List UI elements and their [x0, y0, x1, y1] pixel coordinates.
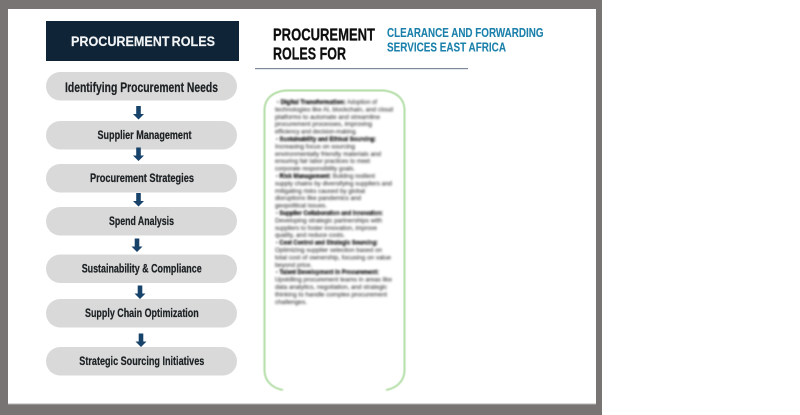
panel: blurred procurement trends text: thinking to handle complex procurement	[275, 291, 387, 298]
arrow 1	[133, 106, 144, 120]
panel: blurred procurement trends text: platforms to automate and streamline	[275, 114, 380, 121]
subtitle: company name: CLEARANCE AND FORWARDING	[387, 26, 544, 40]
panel: blurred procurement trends text: · Sustainability and Ethical Sourcing:	[276, 136, 376, 143]
panel: blurred procurement trends text: geopolitical issues.	[275, 203, 327, 210]
header banner: PROCUREMENT ROLES	[71, 34, 215, 49]
panel: blurred procurement trends text: · Talent Development in Procurement:	[276, 269, 379, 276]
arrow 4	[132, 238, 142, 252]
panel: blurred procurement trends text: · Digital Transformation: Adoption of	[277, 99, 377, 106]
step: Spend Analysis: Spend Analysis	[109, 216, 174, 228]
panel: blurred procurement trends text	[275, 99, 393, 306]
panel: blurred procurement trends text: Optimizing supplier selection based on	[275, 247, 382, 254]
panel: blurred procurement trends text: procurement processes, improving	[275, 121, 372, 128]
panel: blurred procurement trends text: Developing strategic partnerships with	[275, 217, 382, 224]
step: Identifying Procurement Needs	[46, 72, 237, 100]
panel: blurred procurement trends text: challenges.	[275, 299, 307, 306]
panel: blurred procurement trends text: supply chains by diversifying suppliers and	[275, 180, 392, 187]
panel: blurred procurement trends text: environmentally friendly materials and	[275, 151, 381, 158]
step: Procurement Strategies: Procurement Strategies	[90, 173, 194, 185]
panel: blurred procurement trends text: · Cost Control and Strategic Sourcing:	[276, 240, 378, 247]
step: Identifying Procurement Needs: Identifying Procurement Needs	[65, 80, 218, 95]
panel: blurred procurement trends text: technologies like AI, blockchain, and cloud	[275, 106, 393, 113]
panel: blurred procurement trends text: quality, and reduce costs.	[275, 232, 345, 239]
subtitle: company name	[387, 26, 544, 54]
subtitle: company name: SERVICES EAST AFRICA	[387, 40, 506, 54]
step: Spend Analysis	[46, 207, 237, 236]
step: Strategic Sourcing Initiatives	[46, 347, 237, 376]
panel: blurred procurement trends text: total cost of ownership, focusing on value	[275, 254, 391, 261]
main title	[273, 24, 375, 64]
panel: blurred procurement trends text: suppliers to foster innovation, improve	[275, 225, 377, 232]
arrow 2	[133, 148, 144, 161]
step: Supplier Management: Supplier Management	[98, 130, 192, 142]
step: Supplier Management	[46, 121, 237, 150]
step: Sustainability & Compliance	[46, 254, 237, 283]
panel: blurred procurement trends text: data analytics, negotiation, and strategic	[275, 284, 388, 291]
step: Sustainability & Compliance: Sustainability & Compliance	[82, 264, 202, 276]
arrow 6	[136, 334, 146, 347]
step: Supply Chain Optimization	[46, 299, 237, 328]
header banner	[46, 21, 239, 61]
arrow 3	[133, 193, 144, 206]
green rounded panel outline	[264, 90, 404, 390]
title underline	[255, 68, 468, 69]
panel: blurred procurement trends text: disruptions like pandemics and	[275, 195, 361, 202]
step: Procurement Strategies	[46, 164, 237, 192]
step: Supply Chain Optimization: Supply Chain Optimization	[85, 308, 199, 320]
panel: blurred procurement trends text: ensuring fair labor practices to meet	[275, 158, 370, 165]
panel: blurred procurement trends text: · Risk Management: Building resilient	[276, 173, 375, 180]
panel: blurred procurement trends text: efficiency and decision-making.	[275, 129, 357, 136]
panel: blurred procurement trends text: Upskilling procurement teams in areas like	[275, 277, 392, 284]
main title: ROLES FOR	[273, 44, 346, 64]
panel: blurred procurement trends text: corporate responsibility goals.	[275, 166, 355, 173]
panel: blurred procurement trends text: · Supplier Collaboration and Innovation:	[276, 210, 383, 217]
grey slide frame	[0, 0, 602, 415]
panel: blurred procurement trends text: beyond price.	[275, 262, 312, 269]
step: Strategic Sourcing Initiatives: Strategic Sourcing Initiatives	[79, 356, 204, 368]
main title: PROCUREMENT	[273, 24, 375, 44]
left column: procurement roles flow	[46, 21, 239, 376]
panel: blurred procurement trends text: mitigating risks caused by global	[275, 188, 365, 195]
panel: blurred procurement trends text: Increasing focus on sourcing	[275, 143, 355, 150]
arrow 5	[134, 286, 146, 299]
